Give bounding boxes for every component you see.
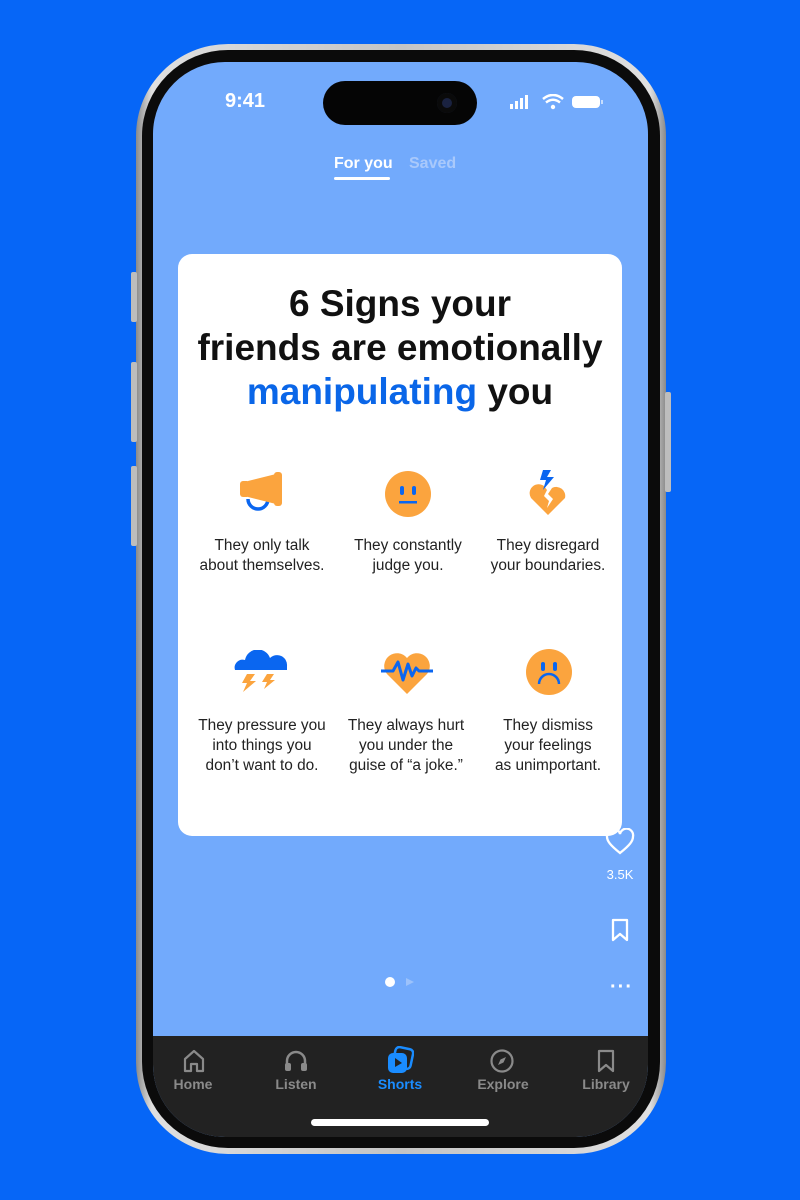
text 4: They pressure you <box>198 717 326 734</box>
text 6: They dismiss <box>503 717 593 734</box>
status bar time: 9:41 <box>225 90 265 112</box>
text 5: They always hurt <box>348 717 464 734</box>
text 2: They constantly <box>354 537 462 554</box>
text 3: your boundaries. <box>491 557 605 574</box>
icon: megaphone <box>240 472 282 511</box>
text 2 <box>354 537 462 574</box>
text 2: judge you. <box>372 557 444 574</box>
screen: Shorts <box>378 1076 422 1092</box>
status icons <box>510 94 603 110</box>
bottom nav <box>153 1036 648 1137</box>
text 5: you under the <box>359 737 453 754</box>
text 4: don’t want to do. <box>206 757 318 774</box>
text 5 <box>348 717 464 774</box>
text 6: as unimportant. <box>495 757 601 774</box>
screen: Home <box>174 1076 212 1092</box>
title <box>197 283 603 412</box>
text 6: your feelings <box>504 737 592 754</box>
screen: Explore <box>477 1076 529 1092</box>
text 3: They disregard <box>497 537 599 554</box>
icon: broken heart <box>530 470 566 515</box>
icon: heartbeat <box>381 653 433 694</box>
pager <box>385 977 395 987</box>
title: manipulating you <box>247 371 553 412</box>
text 3 <box>490 537 605 574</box>
screen <box>153 62 648 1137</box>
text 1 <box>200 537 324 574</box>
card <box>178 254 622 836</box>
text 6 <box>495 717 601 774</box>
text 4 <box>198 717 326 774</box>
side actions <box>606 828 634 854</box>
title: friends are emotionally <box>197 327 603 368</box>
dynamic island <box>323 81 477 125</box>
text 1: They only talk <box>215 537 309 554</box>
text 4: into things you <box>212 737 312 754</box>
phone frame <box>136 44 666 1154</box>
home indicator <box>311 1119 489 1126</box>
side buttons <box>131 272 137 322</box>
icon: sad face <box>526 649 572 695</box>
tabs: For you <box>334 155 393 172</box>
screen: Library <box>582 1076 630 1092</box>
text 5: guise of “a joke.” <box>349 757 463 774</box>
screen: ··· <box>610 976 633 998</box>
screen: Listen <box>275 1076 317 1092</box>
screen: Saved <box>409 155 456 172</box>
text 1: about themselves. <box>200 557 324 574</box>
icon: neutral face <box>385 471 431 517</box>
screen: 3.5K <box>607 867 633 882</box>
icon: storm cloud <box>234 650 288 692</box>
title: 6 Signs your <box>289 283 511 324</box>
